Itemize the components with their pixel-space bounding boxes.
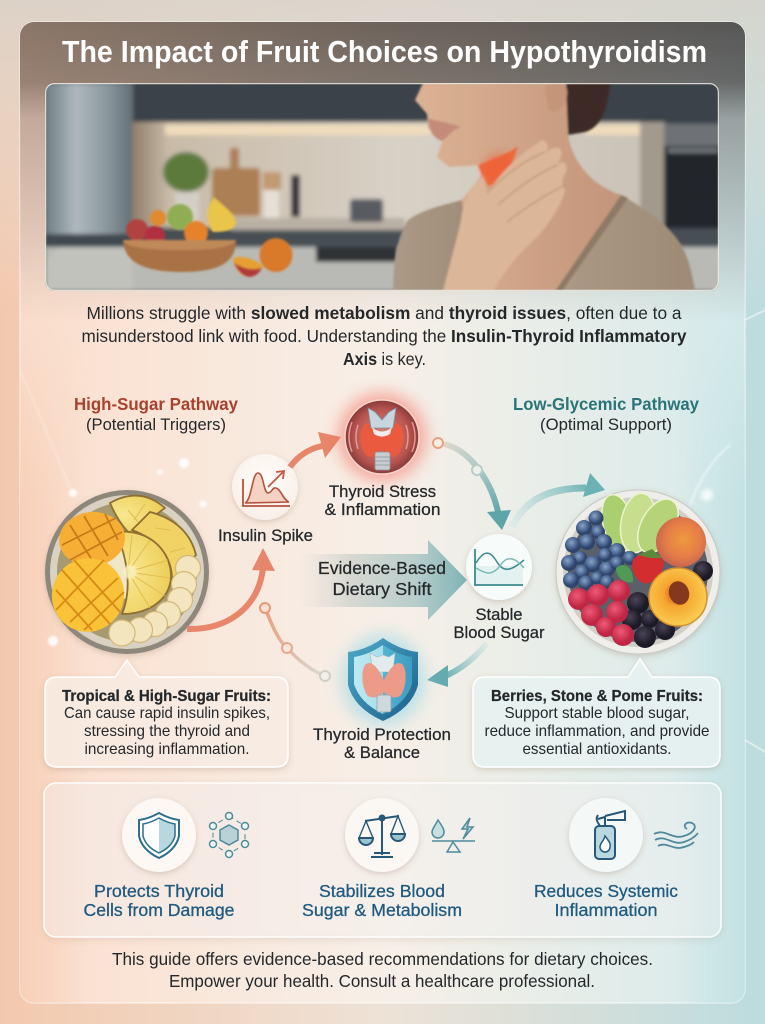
intro paragraph [82, 303, 687, 369]
icon: drop and bolt on balance [432, 818, 475, 852]
label: thyroid stress [324, 483, 440, 519]
arrow: bowl to insulin spike [187, 548, 275, 629]
arrow: central dietary shift [300, 540, 467, 620]
benefit 3: reduces inflammation: Inflammation [554, 900, 658, 920]
arrow: stable blood sugar to low-glycemic bowl [512, 473, 605, 527]
icon: high-sugar fruit bowl [42, 490, 209, 654]
icon: insulin spike [232, 454, 298, 520]
arrow: protection to insulin spike, dotted [260, 603, 330, 681]
benefit 2: stabilizes blood sugar [302, 798, 475, 920]
icon: low-glycemic fruit bowl [556, 490, 720, 654]
peach [656, 517, 706, 567]
apple slices [596, 491, 687, 560]
callout: tropical fruits [45, 660, 288, 767]
heading: high-sugar pathway: (Potential Triggers) [86, 415, 226, 434]
callout: tropical fruits: Tropical & High-Sugar Fruits: [62, 688, 271, 705]
callout: tropical fruits: stressing the thyroid and [84, 723, 250, 740]
callout: berries, stone and pome fruits: reduce inflammation, and provide [484, 723, 710, 740]
panel: benefits [44, 783, 721, 937]
label: thyroid stress: Thyroid Stress [329, 483, 436, 501]
footer text: This guide offers evidence-based recommendations for dietary choices. [112, 949, 653, 969]
callout: berries, stone and pome fruits: Support stable blood sugar, [504, 705, 690, 722]
arrow: central dietary shift: Evidence-Based [318, 558, 446, 578]
label: thyroid protection: Thyroid Protection [313, 726, 451, 744]
benefit 2: stabilizes blood sugar: Sugar & Metabolism [302, 900, 462, 920]
icon: stressed thyroid [338, 393, 426, 481]
arrow: insulin spike to thyroid stress [290, 432, 341, 467]
footer text: Empower your health. Consult a healthcare professional. [169, 971, 595, 991]
label: thyroid stress: & Inflammation [324, 501, 440, 519]
intro paragraph: Millions struggle with slowed metabolism and thyroid issues, often due to a [86, 303, 682, 323]
benefit 1: protects thyroid cells: Protects Thyroid [94, 881, 224, 901]
woman [393, 83, 695, 291]
peach half [649, 568, 707, 626]
callout: berries, stone and pome fruits [473, 659, 720, 767]
raspberries [568, 580, 634, 646]
benefit 1: protects thyroid cells: Cells from Damage [84, 900, 234, 920]
heading: low-glycemic pathway: (Optimal Support) [540, 415, 672, 434]
arrow: thyroid stress to stable blood sugar [433, 438, 511, 530]
callout: berries, stone and pome fruits: essential antioxidants. [522, 741, 672, 758]
callout: berries, stone and pome fruits: Berries, Stone & Pome Fruits: [491, 688, 703, 705]
benefit 3: reduces inflammation [534, 798, 698, 920]
intro paragraph: misunderstood link with food. Understanding the Insulin-Thyroid Inflammatory [82, 326, 687, 346]
pineapple slices [110, 496, 196, 614]
banana slices [109, 556, 200, 646]
label: thyroid protection: & Balance [344, 744, 420, 762]
intro paragraph: Axis is key. [343, 349, 426, 369]
benefit 2: stabilizes blood sugar: Stabilizes Blood [319, 881, 445, 901]
callout: tropical fruits: Can cause rapid insulin spikes, [64, 705, 270, 722]
strawberry [632, 553, 664, 583]
footer text [112, 949, 653, 991]
icon: stable blood sugar [466, 534, 532, 600]
callout: tropical fruits: increasing inflammation. [84, 741, 250, 758]
benefit 3: reduces inflammation: Reduces Systemic [534, 881, 678, 901]
label: stable blood sugar [454, 606, 545, 642]
label: stable blood sugar: Stable [476, 606, 522, 624]
label: insulin spike: Insulin Spike [218, 527, 313, 545]
icon: thyroid protection shield [341, 634, 425, 726]
benefit 1: protects thyroid cells [84, 798, 248, 920]
label: thyroid protection [313, 726, 451, 762]
heading: low-glycemic pathway [513, 394, 699, 434]
icon: cell molecule [210, 812, 248, 858]
label: stable blood sugar: Blood Sugar [454, 624, 545, 642]
heading: low-glycemic pathway: Low-Glycemic Pathway [513, 394, 699, 414]
arrow: central dietary shift: Dietary Shift [332, 579, 432, 599]
blackberries [622, 561, 713, 648]
leaf [616, 565, 633, 582]
blueberries [561, 510, 637, 590]
heading: high-sugar pathway [74, 394, 238, 434]
icon: cooling waves [654, 823, 698, 848]
title: The Impact of Fruit Choices on Hypothyroidism [62, 34, 707, 69]
mangoes [56, 509, 128, 569]
arrow: stable blood sugar to thyroid protection [427, 643, 487, 687]
heading: high-sugar pathway: High-Sugar Pathway [74, 394, 238, 414]
hero photo: woman touching her neck in a kitchen [45, 83, 732, 291]
